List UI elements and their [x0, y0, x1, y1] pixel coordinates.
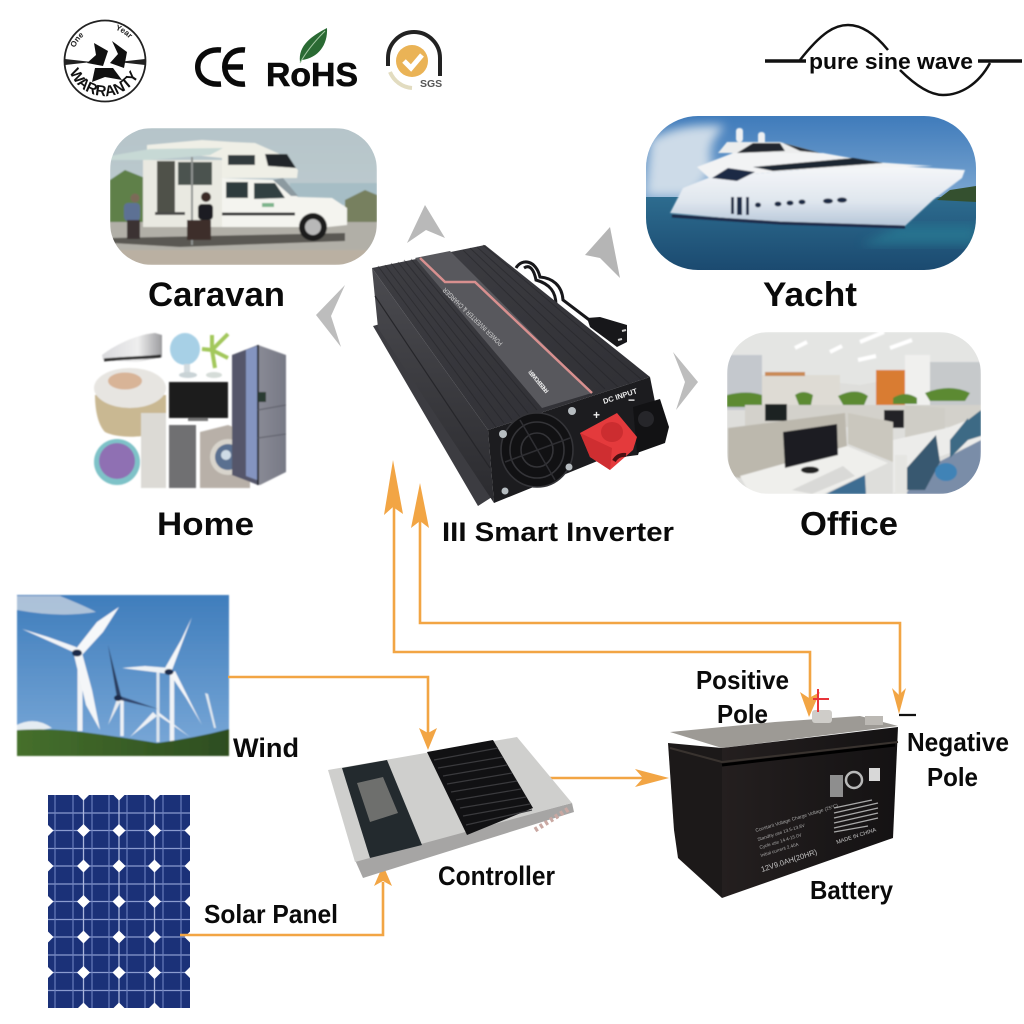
- tower air conditioner: [141, 413, 166, 488]
- battery front face: [722, 727, 898, 898]
- purple cleaner disc: [94, 439, 140, 485]
- wiring: inverter positive to battery: [384, 460, 820, 717]
- panel: yacht photo: [646, 116, 976, 270]
- arrow: right to office: [673, 352, 698, 410]
- icon: one year warranty badge: One: [70, 33, 84, 47]
- display panel: [342, 760, 422, 858]
- panel: solar panel: [48, 795, 190, 1008]
- battery: Standby use 13.5-13.8V: [757, 822, 806, 842]
- label: Negative Pole: [907, 727, 1009, 792]
- label band: [415, 251, 592, 408]
- inverter product: +: [593, 408, 600, 422]
- desk fan: [170, 333, 200, 365]
- wiring: inverter negative to battery: [411, 483, 906, 714]
- arrow: up-right to yacht: [585, 227, 620, 278]
- arrow: left to home: [316, 285, 345, 347]
- label: Home: Home: [157, 506, 254, 542]
- battery: [668, 710, 898, 898]
- icon: one year warranty badge: [64, 20, 146, 102]
- screws: [499, 407, 576, 494]
- label: Caravan: Caravan: [148, 276, 285, 314]
- inverter product: [372, 245, 669, 506]
- negative terminal: [633, 399, 669, 453]
- body top: [328, 737, 572, 862]
- arrow: up to caravan: [407, 205, 445, 243]
- hills: [17, 729, 229, 756]
- label: Battery: Battery: [810, 875, 893, 905]
- side face: [372, 268, 494, 503]
- green fan: [202, 334, 228, 368]
- label: Positive Pole: [696, 665, 789, 729]
- top face: [372, 245, 650, 430]
- label: Negative Pole: Negative: [907, 727, 1009, 757]
- heat sink: [427, 740, 533, 835]
- made in china: MADE IN CHINA: [836, 827, 877, 846]
- DC input markings: DC INPUT: [602, 386, 639, 406]
- label: III Smart Inverter: III Smart Inverter: [442, 517, 675, 547]
- label: Yacht: Yacht: [763, 276, 858, 314]
- near turbine left: [22, 607, 119, 731]
- brand: PRESS POWER: [528, 368, 551, 394]
- battery top: [670, 716, 898, 748]
- icon: positive sign: [813, 689, 829, 712]
- label: Negative Pole: Pole: [927, 762, 978, 792]
- label: Controller: Controller: [438, 861, 555, 891]
- wiring: controller to battery: [550, 769, 669, 787]
- slim fridge: [169, 425, 196, 488]
- label: Wind: Wind: [233, 733, 299, 763]
- mounting flange: [373, 323, 492, 506]
- battery left face: [668, 743, 722, 898]
- wiring: wind to controller: [228, 677, 437, 750]
- power cord: [516, 262, 627, 347]
- rice cooker: [95, 395, 166, 437]
- icon: one year warranty badge: WARRANTY: [70, 66, 137, 96]
- icon: pure sine wave: [765, 25, 1022, 95]
- battery: Cycle use 14.4-15.0V: [759, 832, 803, 850]
- television: [169, 382, 228, 418]
- icon: negative sign: [899, 714, 916, 716]
- lid ridge: [670, 742, 898, 762]
- label: Positive Pole: Pole: [717, 699, 768, 729]
- label: Office: Office: [800, 505, 898, 542]
- recycle marks: [830, 768, 880, 797]
- printed model text: POWER INVERTER & CHARGER: [442, 286, 504, 347]
- pink stripe: [420, 258, 592, 393]
- label: Solar Panel: Solar Panel: [204, 899, 338, 929]
- icon: SGS seal: [388, 32, 442, 90]
- icon: CE mark: [196, 50, 245, 88]
- connector pins: [535, 808, 570, 830]
- controller device: [328, 737, 574, 878]
- icon: one year warranty badge: Year: [117, 24, 132, 38]
- panel: office photo: [727, 332, 981, 494]
- LCD screen: [357, 777, 398, 822]
- specification text: Constant Voltage Charge Voltage (25°C): [755, 803, 839, 834]
- caution text: [834, 800, 878, 832]
- icon: SGS seal: SGS: [420, 78, 442, 90]
- near turbine right: [122, 617, 202, 741]
- front face: [488, 377, 655, 503]
- body side: [355, 803, 574, 878]
- panel: home appliances: [94, 333, 286, 488]
- air conditioner: [102, 333, 162, 362]
- caravan body: [110, 140, 347, 245]
- far turbines: [108, 645, 216, 742]
- fan: [501, 413, 573, 487]
- inverter product: −: [628, 393, 635, 407]
- people: [124, 192, 213, 240]
- label: Positive Pole: Positive: [696, 665, 789, 695]
- panel: caravan photo: [110, 128, 377, 265]
- icon: CE mark: CE: [196, 86, 199, 88]
- capacity label: 12V9.0AH(20HR): [760, 847, 819, 874]
- battery: Initial current 2.40A: [760, 841, 800, 858]
- yacht: [670, 128, 965, 227]
- panel: wind turbines photo: [17, 595, 229, 756]
- wiring: solar panel to controller: [180, 865, 392, 935]
- washer: [200, 425, 250, 488]
- icon: RoHS mark with leaf: RoHS: [266, 56, 358, 93]
- icon: pure sine wave: pure sine wave: [809, 49, 973, 74]
- tall fridge: [232, 345, 286, 485]
- positive red terminal: [580, 413, 637, 470]
- icon: RoHS mark with leaf: [266, 28, 358, 93]
